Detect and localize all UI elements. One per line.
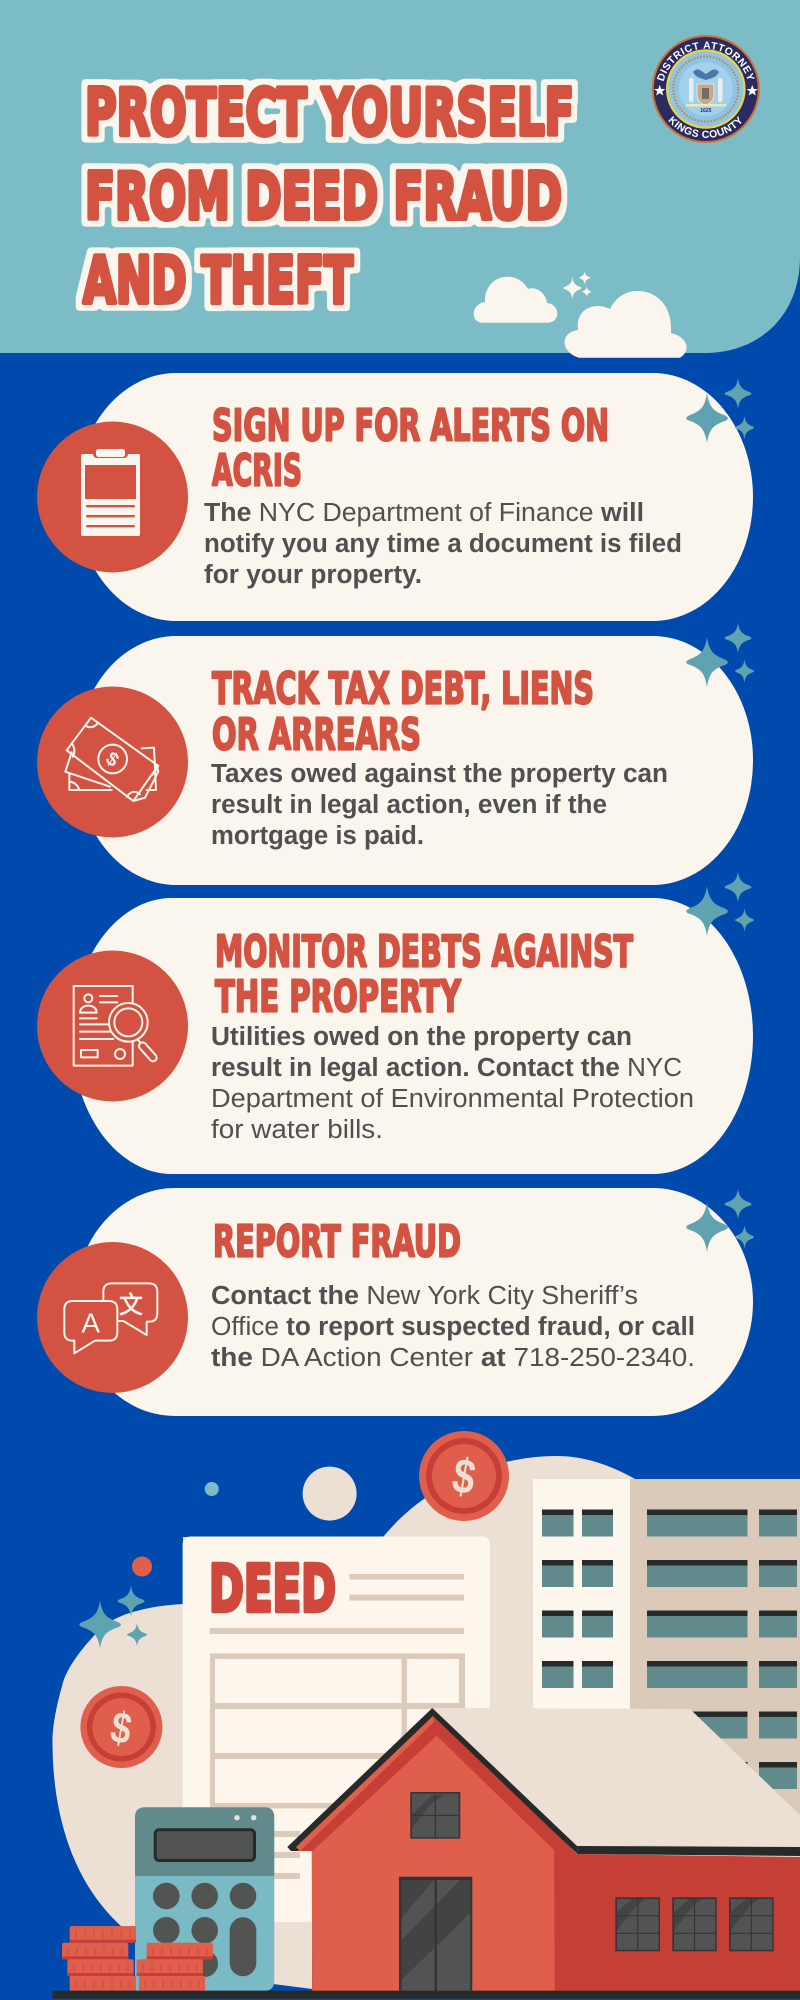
icon: header sparkles <box>564 271 591 299</box>
logo: District Attorney Kings County seal <box>652 35 760 143</box>
text block: taxes owed: Taxes owed against the property can <box>211 760 668 788</box>
text block: utilities owed: Utilities owed on the property can <box>211 1023 632 1051</box>
coin stacks <box>62 1926 213 1991</box>
ground line <box>52 1991 800 1999</box>
heading: track tax debt, liens or arrears <box>212 664 594 760</box>
text block: taxes owed <box>211 760 668 850</box>
house <box>287 1708 800 1991</box>
text block: utilities owed: for water bills. <box>211 1116 383 1144</box>
text block: ACRIS notification: notify you any time a document is filed <box>204 530 682 558</box>
cloud: left <box>474 277 557 323</box>
title <box>83 76 574 318</box>
panel: report fraud <box>37 1188 754 1416</box>
background blob <box>52 1456 800 1990</box>
text block: contact the sheriff <box>211 1282 695 1372</box>
building <box>533 1479 800 1849</box>
heading: sign up for alerts on ACRIS: SIGN UP FOR ALERTS ON <box>212 402 609 452</box>
icon: sparkles <box>686 378 754 443</box>
icon: translation speech bubbles in circle <box>37 1242 188 1393</box>
icon: sparkles <box>686 1189 754 1252</box>
text block: contact the sheriff: Office to report suspected fraud, or call <box>211 1313 695 1341</box>
panel: monitor debts <box>37 872 754 1174</box>
text block: utilities owed: Department of Environmental Protection <box>211 1085 694 1113</box>
decorative circle: teal <box>205 1482 219 1496</box>
icon: clipboard in circle <box>37 422 188 572</box>
logo: District Attorney Kings County seal: DISTRICT ATTORNEY <box>656 42 755 82</box>
text block: taxes owed: mortgage is paid. <box>211 822 424 850</box>
icon: sparkles <box>686 623 754 687</box>
text block: contact the sheriff: Contact the New York City Sheriff’s <box>211 1282 638 1310</box>
text block: ACRIS notification: The NYC Department of Finance will <box>204 499 644 527</box>
window: gable <box>410 1792 460 1839</box>
windows: wing <box>615 1897 774 1951</box>
icon: translation speech bubbles in circle: A <box>81 1307 100 1338</box>
roof <box>432 1708 800 1847</box>
text block: utilities owed: result in legal action. Contact the NYC <box>211 1054 682 1082</box>
title: AND THEFT <box>83 244 353 318</box>
heading: monitor debts against the property <box>215 928 633 1022</box>
panel: sign up for alerts <box>37 373 754 621</box>
calculator <box>135 1807 274 1991</box>
logo: District Attorney Kings County seal: 1625 <box>700 108 712 114</box>
decorative circle: red <box>132 1556 152 1576</box>
icon: sparkles <box>686 872 754 936</box>
heading: monitor debts against the property: THE PROPERTY <box>215 972 461 1022</box>
heading: track tax debt, liens or arrears: OR ARREARS <box>212 710 421 760</box>
icon: translation speech bubbles in circle: 文 <box>119 1285 143 1320</box>
icon: banknotes in circle <box>37 686 188 838</box>
illustration: bottom scene <box>52 1431 800 1999</box>
icon: document and magnifier in circle <box>37 950 188 1102</box>
icon: sparkles <box>79 1586 147 1648</box>
heading: sign up for alerts on ACRIS: ACRIS <box>212 446 302 496</box>
heading: sign up for alerts on ACRIS <box>212 402 609 496</box>
heading: track tax debt, liens or arrears: TRACK TAX DEBT, LIENS <box>212 664 594 714</box>
title: PROTECT YOURSELF <box>85 76 574 150</box>
panel: header band <box>0 0 800 353</box>
text block: taxes owed: result in legal action, even if the <box>211 791 607 819</box>
title: FROM DEED FRAUD <box>85 160 562 234</box>
door <box>399 1877 472 1991</box>
icon: banknotes in circle: $ <box>102 748 123 772</box>
coin: left <box>80 1686 162 1768</box>
text block: ACRIS notification <box>204 499 682 589</box>
text block: contact the sheriff: the DA Action Center at 718-250-2340. <box>211 1344 695 1372</box>
decorative circle: cream <box>303 1467 357 1521</box>
text block: utilities owed <box>211 1023 694 1144</box>
coin: top: $ <box>448 1448 479 1505</box>
heading: deed: DEED <box>209 1553 336 1627</box>
logo: District Attorney Kings County seal: KINGS COUNTY <box>668 116 742 138</box>
text block: ACRIS notification: for your property. <box>204 561 422 589</box>
heading: report fraud: REPORT FRAUD <box>213 1218 461 1268</box>
coin: top <box>419 1431 509 1521</box>
document: deed <box>183 1536 490 1922</box>
cloud: right <box>565 291 687 358</box>
panel: track tax debt <box>37 623 754 885</box>
coin: left: $ <box>107 1703 135 1754</box>
